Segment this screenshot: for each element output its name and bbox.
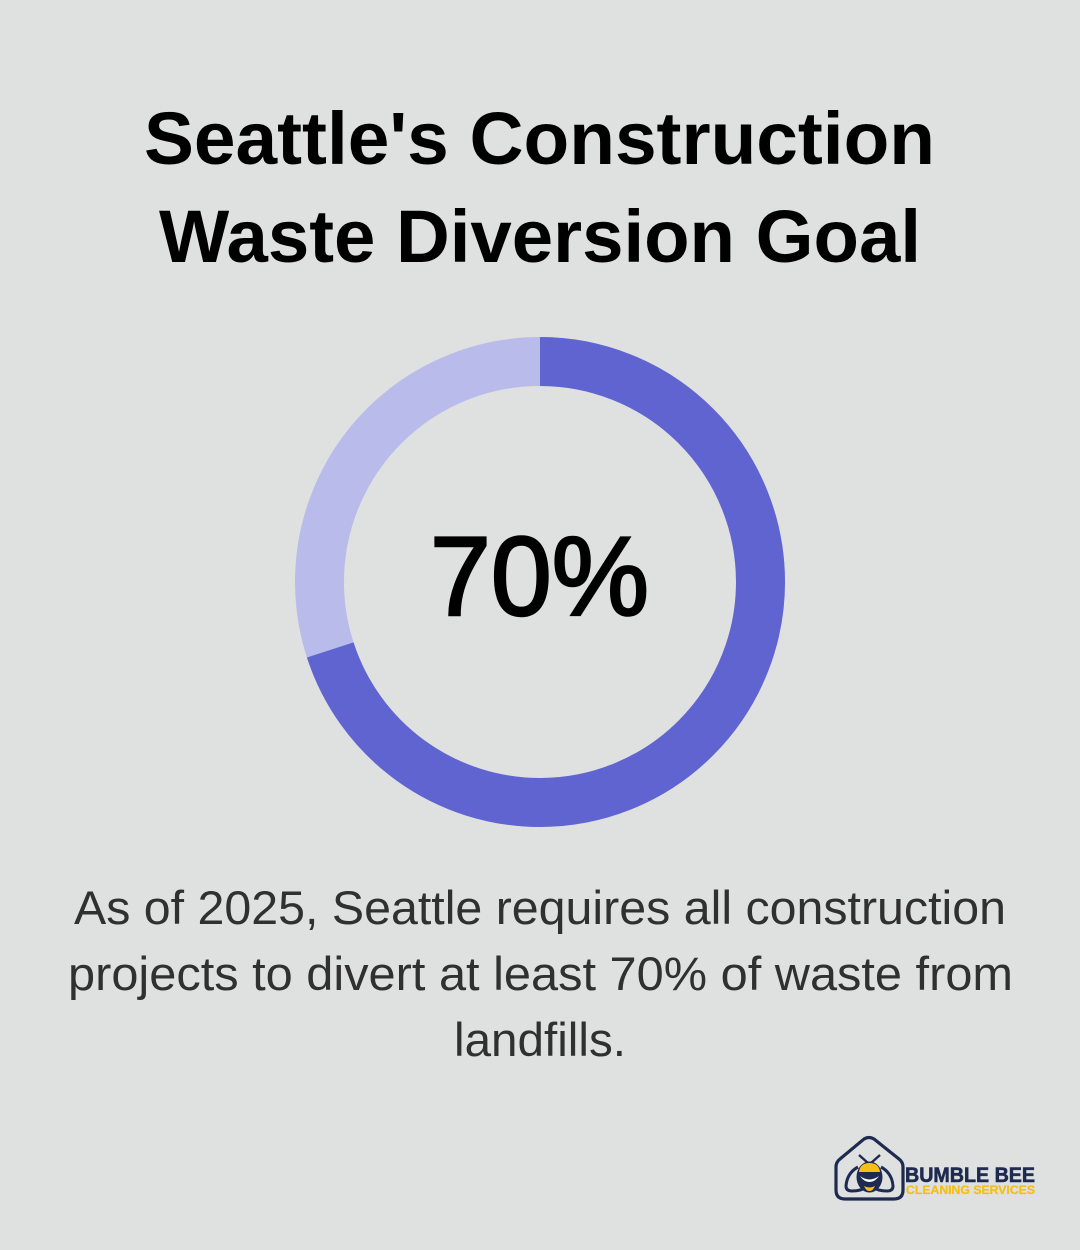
description text: As of 2025, Seattle requires all construction [74,881,1006,934]
logo: Bumble Bee Cleaning Services [836,1138,1035,1199]
description text: landfills. [454,1013,626,1066]
title: Seattle's Construction [144,97,935,180]
percentage value: 70% [430,514,649,639]
logo tagline: CLEANING SERVICES [906,1183,1035,1197]
donut chart: 70% [320,362,760,802]
description text: projects to divert at least 70% of waste from [68,947,1013,1000]
title: Waste Diversion Goal [159,195,921,278]
icon: house outline with bee [836,1138,903,1199]
description text [68,881,1013,1066]
title [144,97,935,278]
logo wordmark: BUMBLE BEE [905,1164,1035,1187]
